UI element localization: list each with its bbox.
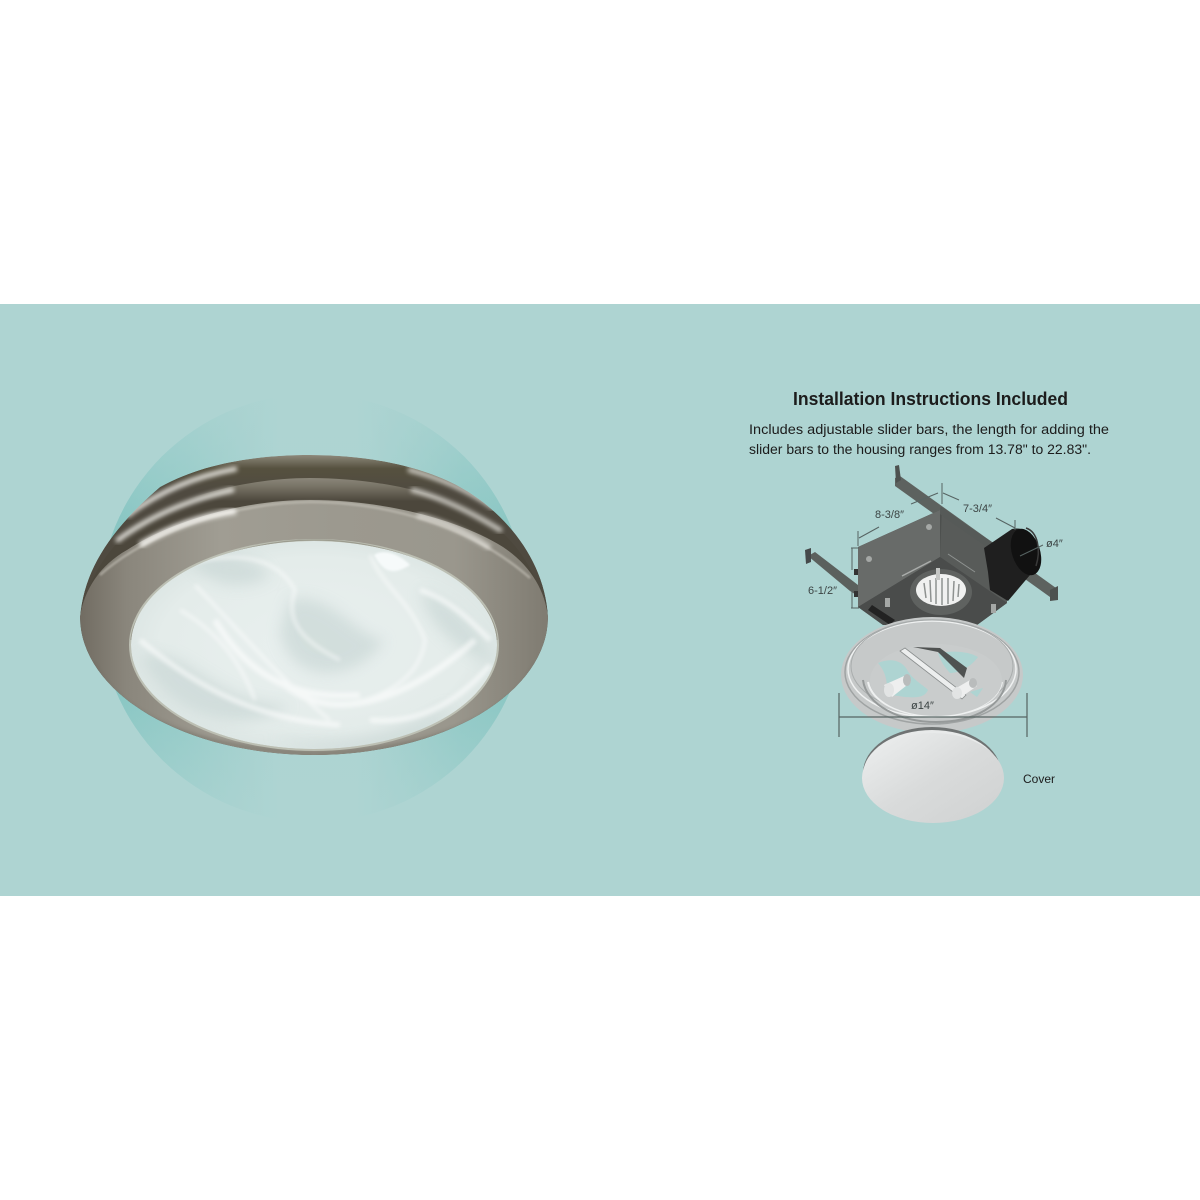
- openings in the ring: [878, 660, 928, 697]
- housing box: [858, 507, 1007, 625]
- product photo: ceiling light fixture: [80, 455, 548, 755]
- teal background band: [0, 304, 1200, 896]
- heading: Installation Instructions Included: [793, 389, 1068, 409]
- dimension: diameter 14: ø14″: [911, 700, 934, 712]
- dimension: 8-3/8: 8-3/8″: [875, 509, 904, 521]
- diagram: fan housing with dimensions: [805, 465, 1063, 625]
- dimension: diameter 4: ø4″: [1046, 538, 1063, 550]
- rear ring: [80, 455, 548, 755]
- dimension: 6-1/2: 6-1/2″: [808, 585, 837, 597]
- inner grooves: [863, 680, 1006, 722]
- ring highlights: [118, 469, 500, 540]
- duct connector: [984, 525, 1047, 601]
- dimension lines: [851, 483, 1043, 608]
- diameter line: [839, 693, 1027, 737]
- front metal trim: [80, 500, 548, 755]
- diagram: cover: [862, 727, 1004, 823]
- diagram: trim ring: [839, 617, 1027, 737]
- rear slider bar: [895, 465, 1058, 601]
- middle ring: [199, 478, 428, 498]
- description text: Includes adjustable slider bars, the length for adding the: [749, 422, 1109, 437]
- front slider bar: [805, 548, 858, 597]
- description text: [749, 422, 1109, 457]
- description text: slider bars to the housing ranges from 13.78" to 22.83".: [749, 442, 1091, 457]
- cover label: Cover: [1023, 772, 1055, 786]
- dimension: 7-3/4: 7-3/4″: [963, 503, 992, 515]
- mounting bracket: [900, 648, 966, 699]
- alabaster glass diffuser: [131, 541, 497, 751]
- teal circle behind lamp: [98, 394, 528, 822]
- fan blower: [910, 568, 972, 615]
